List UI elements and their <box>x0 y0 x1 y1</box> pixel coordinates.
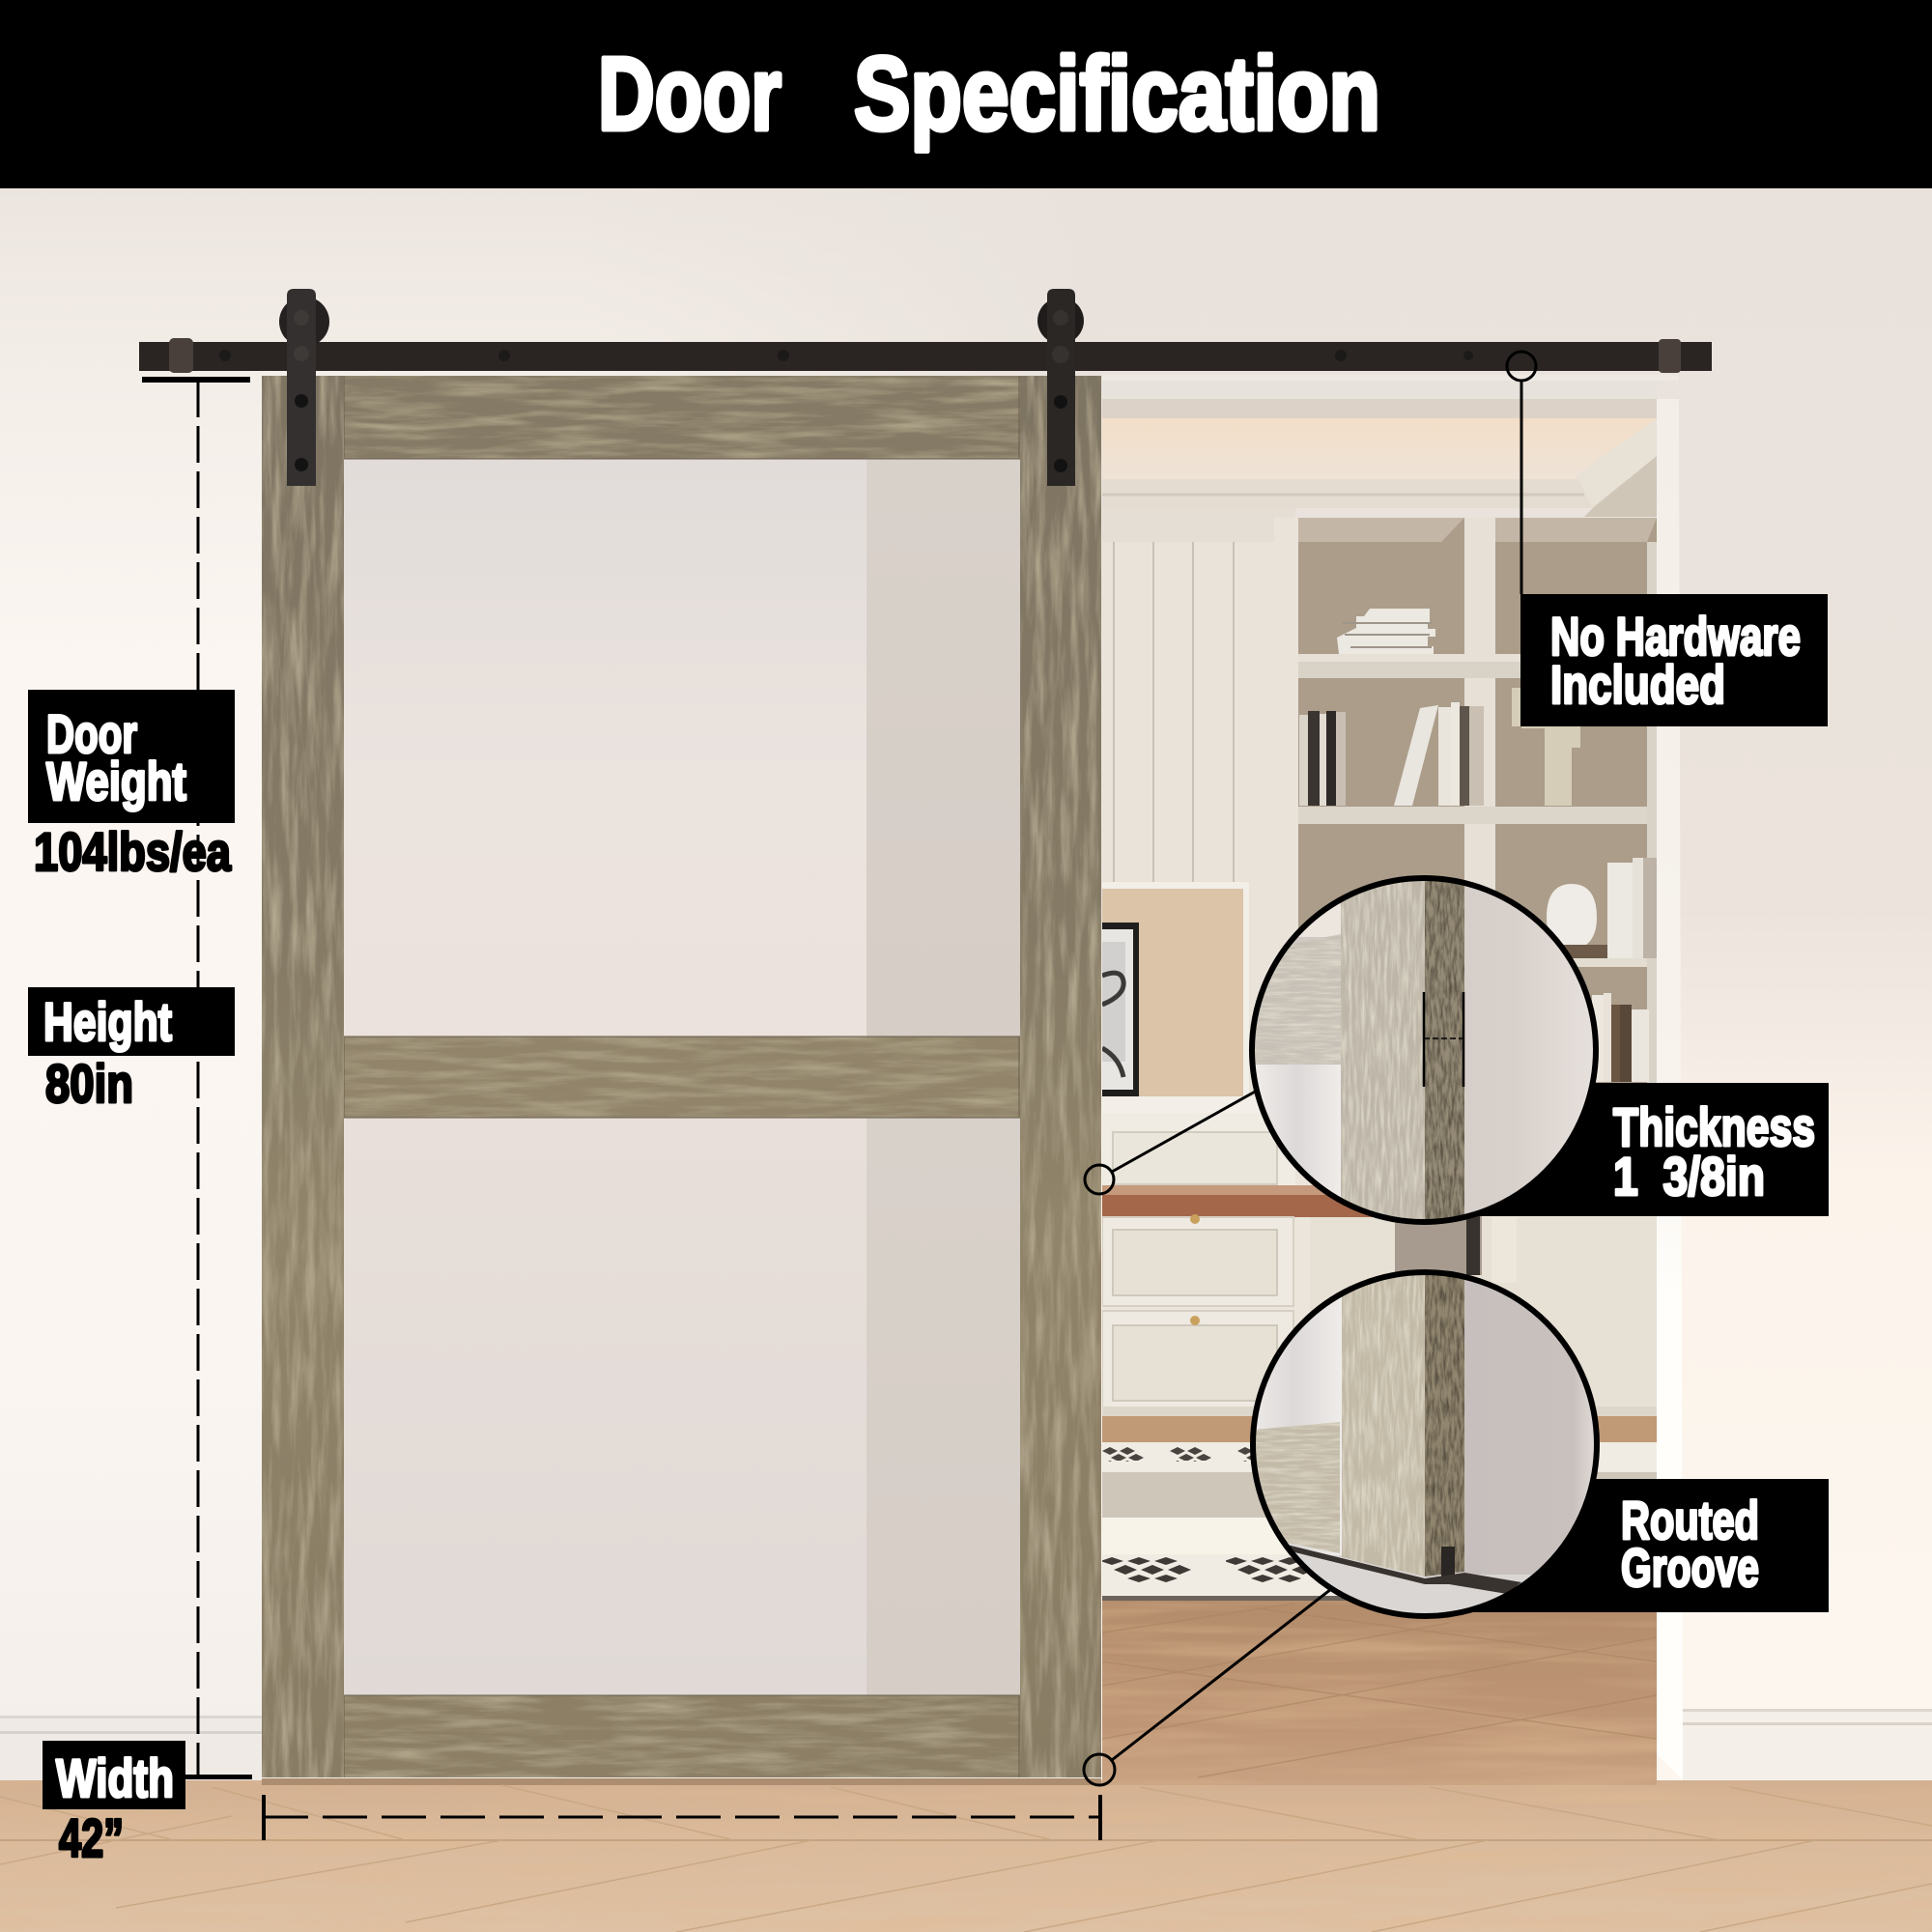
height dimension line <box>142 377 252 1779</box>
barn door track hardware <box>139 289 1712 486</box>
callout: thickness label box: Thickness <box>1613 1096 1815 1157</box>
callout: thickness label box: 1 3/8in <box>1613 1146 1765 1207</box>
value: height: 80in <box>45 1053 133 1114</box>
right stile <box>1020 376 1101 1777</box>
bookcase <box>1298 518 1657 1083</box>
callout: no hardware included: No Hardware <box>1550 606 1801 667</box>
framed art <box>1102 882 1249 1101</box>
door <box>262 376 1101 1777</box>
books and decor <box>1299 609 1657 1082</box>
rail edge lines <box>344 376 1020 1777</box>
title bar <box>0 0 1932 188</box>
bottom rail <box>344 1695 1020 1777</box>
value: door weight: 104lbs/ea <box>34 821 232 882</box>
callout: no hardware included: Included <box>1550 654 1725 715</box>
floor with rug <box>1102 1406 1657 1787</box>
label: door weight: Weight <box>46 751 186 811</box>
room seen through doorway <box>1102 371 1658 1787</box>
detail circle: thickness <box>1246 869 1604 1232</box>
label: height: Height <box>43 991 172 1052</box>
callout leader: routed groove <box>1084 1589 1331 1785</box>
left hanger <box>279 289 329 486</box>
callout: no hardware included <box>1520 594 1828 726</box>
top rail <box>344 376 1020 459</box>
detail circle: routed groove <box>1246 1265 1609 1623</box>
cabinets and counter <box>1102 1096 1658 1420</box>
left stile <box>262 376 344 1777</box>
value: width: 42” <box>59 1807 124 1868</box>
title bar: Door <box>598 35 781 152</box>
label: door weight <box>28 690 235 823</box>
rail <box>139 342 1712 371</box>
thickness ticks <box>1424 992 1463 1087</box>
callout leader: hardware <box>1507 352 1536 594</box>
glass panel lower <box>344 1118 1020 1697</box>
rail end stops and bolts <box>169 338 1681 373</box>
callout: routed groove label box: Routed <box>1621 1490 1759 1550</box>
middle rail <box>344 1037 1020 1118</box>
wall planks <box>1113 542 1256 1096</box>
label: door weight: Door <box>46 703 137 764</box>
glass panel upper <box>344 458 1020 1037</box>
callout: thickness label box <box>1449 1083 1829 1216</box>
doorway jamb <box>1102 375 1683 1780</box>
label: width: Width <box>56 1747 174 1808</box>
right hanger <box>1037 289 1084 486</box>
soffit and ceiling cove <box>1102 399 1657 517</box>
callout: routed groove label box: Groove <box>1621 1537 1759 1598</box>
callout: routed groove label box <box>1449 1479 1829 1612</box>
width dimension line <box>262 1795 1102 1840</box>
callout leader: thickness <box>1085 1091 1257 1194</box>
title bar: Specification <box>854 35 1380 152</box>
